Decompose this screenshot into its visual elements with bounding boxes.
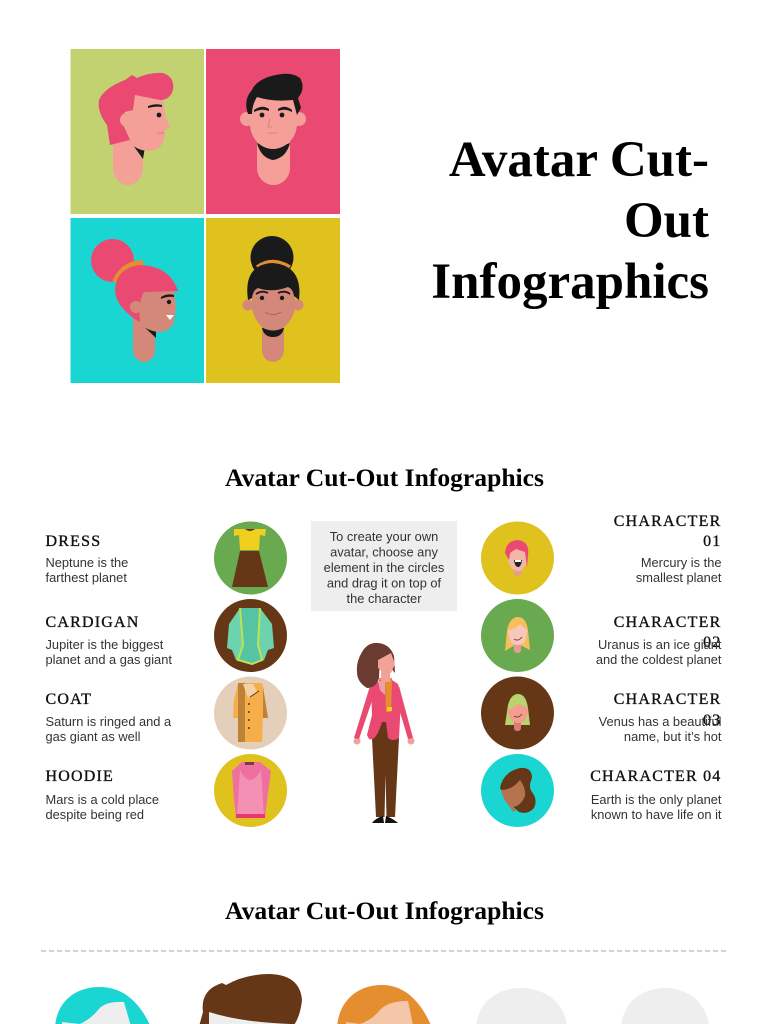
head: brown hair xyxy=(198,974,302,1024)
section heading: Avatar Cut-Out Infographics xyxy=(225,463,544,492)
label: character 01 xyxy=(614,513,722,585)
callout: and drag it on top of xyxy=(327,576,442,590)
label: character 03 xyxy=(599,691,722,744)
label: character 04: known to have life on it xyxy=(591,807,722,822)
label: character 03: 03 xyxy=(703,712,722,729)
label: character 01: 01 xyxy=(703,533,722,550)
label: hoodie: HOODIE xyxy=(46,768,114,785)
label: character 01: smallest planet xyxy=(636,570,722,585)
label: dress xyxy=(46,533,128,585)
label: cardigan xyxy=(46,614,172,667)
icon: character 01 xyxy=(481,522,554,594)
label: character 03: name, but it’s hot xyxy=(624,729,722,744)
label: character 01: CHARACTER xyxy=(614,513,722,530)
icon: character 03 xyxy=(481,676,554,750)
head: orange hair xyxy=(337,985,433,1024)
label: character 04: CHARACTER 04 xyxy=(590,768,722,785)
label: dress: Neptune is the xyxy=(46,555,128,570)
label: character 04: Earth is the only planet xyxy=(591,792,722,807)
icon: character 02 xyxy=(481,599,554,672)
label: coat: COAT xyxy=(46,691,92,708)
avatar grid xyxy=(70,49,340,383)
label: hoodie: Mars is a cold place xyxy=(46,792,159,807)
icon: character 04 xyxy=(481,754,554,827)
label: coat xyxy=(46,691,172,744)
label: coat: gas giant as well xyxy=(46,729,140,744)
label: cardigan: Jupiter is the biggest xyxy=(46,637,164,652)
label: character 04 xyxy=(590,768,722,822)
callout: element in the circles xyxy=(324,560,444,575)
character figure xyxy=(354,643,414,823)
head: blank 1 xyxy=(476,988,567,1024)
panel: yellow avatar xyxy=(206,218,340,383)
icon: cardigan xyxy=(214,599,287,672)
right labels xyxy=(590,513,722,822)
label: character 03: Venus has a beautiful xyxy=(599,714,722,729)
icon: dress xyxy=(214,522,287,594)
head: blank 2 xyxy=(621,988,709,1024)
label: character 01: Mercury is the xyxy=(641,555,722,570)
label: character 02: CHARACTER xyxy=(614,614,722,631)
label: character 02: and the coldest planet xyxy=(596,652,722,667)
panel: pink avatar xyxy=(206,49,340,214)
icon: coat xyxy=(214,676,287,750)
label: cardigan: planet and a gas giant xyxy=(46,652,172,667)
label: hoodie xyxy=(46,768,159,822)
callout: avatar, choose any xyxy=(330,544,438,560)
section heading 2: Avatar Cut-Out Infographics xyxy=(225,896,544,925)
right icons xyxy=(481,522,554,827)
icon: hoodie xyxy=(214,754,287,827)
head: cyan hair xyxy=(55,987,152,1024)
label: character 02 xyxy=(596,614,722,667)
cut-out heads row xyxy=(55,974,709,1024)
label: dress: DRESS xyxy=(46,533,101,550)
label: character 02: Uranus is an ice giant xyxy=(598,637,722,652)
label: character 03: CHARACTER xyxy=(614,691,722,708)
title: Avatar Cut- xyxy=(449,132,709,188)
label: hoodie: despite being red xyxy=(46,807,144,822)
label: character 02: 02 xyxy=(703,634,722,651)
panel: green avatar xyxy=(70,49,204,214)
left labels xyxy=(46,533,172,822)
callout xyxy=(311,521,457,611)
panel: cyan avatar xyxy=(70,218,204,383)
callout: the character xyxy=(347,591,422,606)
label: dress: farthest planet xyxy=(46,570,127,585)
label: coat: Saturn is ringed and a xyxy=(46,714,172,729)
title: Out xyxy=(624,193,709,249)
title: Infographics xyxy=(431,254,709,310)
label: cardigan: CARDIGAN xyxy=(46,614,140,631)
callout: To create your own xyxy=(330,529,438,544)
